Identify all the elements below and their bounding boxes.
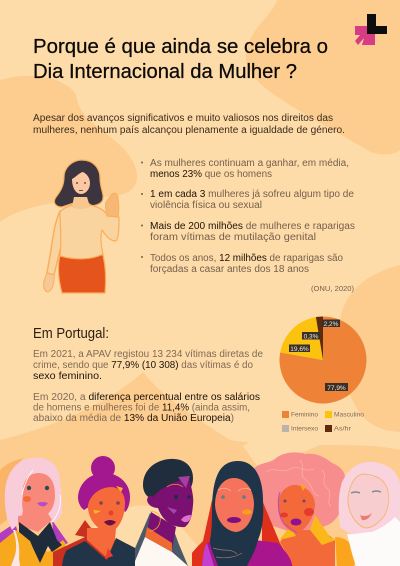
hair: [54, 160, 103, 207]
woman 1 purple: [0, 523, 22, 550]
woman 2 face: [88, 487, 125, 533]
label 19,6%: 19,6%: [290, 346, 309, 353]
woman 3 neck: [147, 512, 176, 550]
illustration: six women: [0, 452, 400, 566]
heading: Em Portugal: Em Portugal:: [33, 326, 109, 342]
collar: [72, 197, 90, 209]
woman 6 face: [348, 474, 389, 528]
logo: [355, 14, 387, 45]
woman 2 hair: [91, 456, 115, 480]
pie legend: Intersexo: [291, 426, 318, 432]
left hand: [44, 273, 54, 292]
text: Portugal statistics: crime, sendo que 77,9% (10 308) das vítimas é do: [33, 360, 254, 371]
trousers: [59, 255, 106, 293]
pie legend: [282, 411, 364, 432]
text: Portugal statistics: [33, 349, 264, 424]
woman 3 face: [147, 478, 193, 527]
woman 6: [339, 462, 400, 566]
woman 5 hair: [253, 452, 345, 535]
woman 1 scarf: [19, 522, 62, 563]
woman 1 shadow: [0, 458, 24, 525]
title: [33, 35, 328, 83]
text: Portugal statistics: Em 2020, a diferença percentual entre os salários: [33, 392, 260, 403]
pie legend: As/hr: [334, 426, 352, 432]
intro text: Apesar dos avanços significativos e muito valiosos nos direitos das: [33, 113, 333, 124]
bullet 1: As mulheres continuam a ganhar, em média,: [150, 158, 349, 169]
bullet 1: [141, 158, 349, 180]
pie legend: Masculino: [334, 412, 364, 418]
woman 4 red backing: [192, 500, 220, 566]
text: Portugal statistics: Em 2021, a APAV registou 13 234 vítimas diretas de: [33, 349, 264, 360]
woman 4: [192, 461, 293, 566]
woman 1 hair: [5, 458, 62, 530]
woman 5 face: [278, 485, 315, 533]
woman 2: [53, 456, 135, 566]
text: Portugal statistics: de homens e mulheres foi de 11,4% (ainda assim,: [33, 402, 250, 414]
woman 2 red jacket: [53, 520, 135, 566]
woman 1 braid: [11, 530, 20, 566]
bullet 4: forçadas a casar antes dos 18 anos: [150, 264, 309, 275]
intro text: mulheres, nenhum país alcançou plenamente a igualdade de género.: [33, 125, 345, 136]
title: Porque é que ainda se celebra o: [33, 35, 328, 58]
woman 1 top: [0, 530, 66, 566]
illustration: woman waving: [44, 160, 119, 293]
sweater: [60, 205, 119, 259]
woman 2 navy top: [62, 538, 135, 566]
bullet 4: Todos os anos, 12 milhões de raparigas são: [150, 253, 344, 264]
woman 2 neck: [87, 528, 116, 558]
bullet 3: Mais de 200 milhões de mulheres e raparigas: [150, 221, 355, 232]
face features: [76, 182, 86, 191]
woman 3 white top: [133, 537, 188, 566]
woman 3 jacket: [130, 513, 188, 566]
woman 1 face and neck: [20, 473, 55, 530]
text: Portugal statistics: sexo feminino.: [33, 371, 102, 382]
woman 5 sleeve: [335, 537, 356, 566]
slice: As/hr: [316, 316, 323, 360]
woman 5 shoulders: [280, 530, 335, 566]
woman 3: [130, 459, 193, 566]
slice: Feminino: [279, 316, 366, 404]
intro text: [33, 113, 345, 136]
bullet 3: [141, 221, 355, 243]
bullet list: [141, 158, 355, 275]
face: [72, 172, 90, 194]
bullet 2: [141, 189, 355, 211]
woman 4 face: [215, 478, 254, 532]
woman 4 clothes: [202, 540, 292, 566]
pie legend: Feminino: [291, 412, 318, 418]
bullet 2: 1 em cada 3 mulheres já sofreu algum tipo de: [150, 189, 355, 200]
label 77,9%: 77,9%: [327, 385, 346, 392]
woman 4 hijab: [210, 461, 263, 566]
woman 6 hair: [339, 462, 400, 535]
title: Dia Internacional da Mulher ?: [33, 60, 297, 83]
source note: (ONU, 2020): [311, 284, 355, 293]
label 2,2%: 2,2%: [324, 321, 339, 328]
woman 1: [0, 458, 68, 566]
bullet 4: [141, 253, 344, 275]
bullet 1: menos 23% que os homens: [150, 169, 272, 180]
left arm: [47, 211, 64, 275]
woman 6 white top: [347, 517, 400, 566]
raised hand: [106, 193, 119, 217]
woman 3 hair: [143, 459, 193, 498]
text: Portugal statistics: abaixo da média de 13% da União Europeia ): [33, 413, 234, 424]
woman 5: [253, 452, 356, 566]
slice: Masculino: [280, 317, 323, 360]
pie chart: [279, 316, 366, 404]
label 0,3%: 0,3%: [304, 334, 319, 340]
bullet 2: violência física ou sexual: [150, 200, 262, 211]
bullet 3: foram vítimas de mutilação genital: [150, 232, 316, 243]
